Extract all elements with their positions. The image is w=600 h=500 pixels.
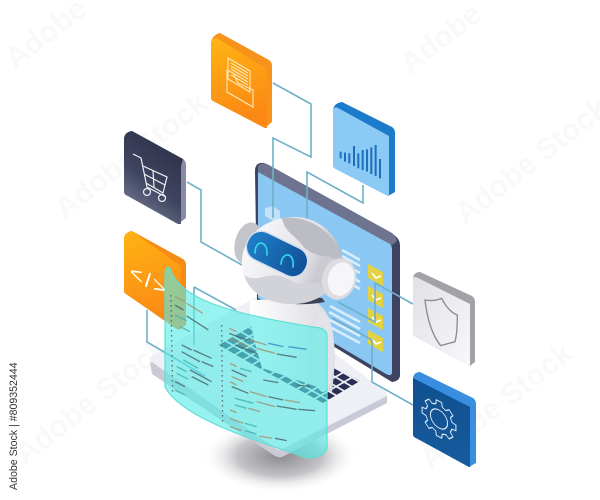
icon: bars [341, 145, 380, 178]
robot head [242, 217, 342, 304]
holographic code panel [165, 268, 327, 458]
watermark: Adobe Stock [49, 86, 214, 226]
robot visor [242, 226, 312, 282]
left code column [171, 295, 213, 395]
floor shadow [202, 419, 358, 493]
screen text lines [328, 250, 360, 343]
right code column [222, 325, 315, 441]
icon: code symbol: </> [130, 259, 168, 304]
hologram sheet [165, 268, 327, 458]
tile: code [124, 231, 186, 330]
robot eyes [255, 243, 293, 267]
icon: cart [133, 154, 167, 202]
robot right ear [312, 253, 361, 304]
tile: folder [211, 33, 272, 128]
robot [230, 217, 361, 392]
robot arm [312, 312, 334, 392]
tile: shopping cart [124, 131, 186, 224]
tile: bar chart [333, 102, 395, 196]
tile: gear [413, 372, 476, 467]
laptop screen [255, 163, 400, 382]
screen document icon [265, 206, 280, 225]
watermark: Adobe Stock [414, 336, 579, 476]
checklist boxes [368, 264, 383, 352]
laptop [149, 163, 400, 457]
icon: shield [425, 298, 457, 346]
stock credit text: Adobe Stock | #809352444 [8, 362, 20, 490]
connector lines [147, 83, 413, 405]
tile: shield [413, 272, 475, 366]
robot left ear [230, 219, 266, 267]
laptop base [149, 296, 387, 457]
icon: gear [422, 392, 456, 446]
robot neck [268, 292, 325, 304]
watermark: Adobe Stock [9, 331, 174, 471]
icon: folder [227, 58, 253, 107]
robot body [250, 299, 335, 392]
